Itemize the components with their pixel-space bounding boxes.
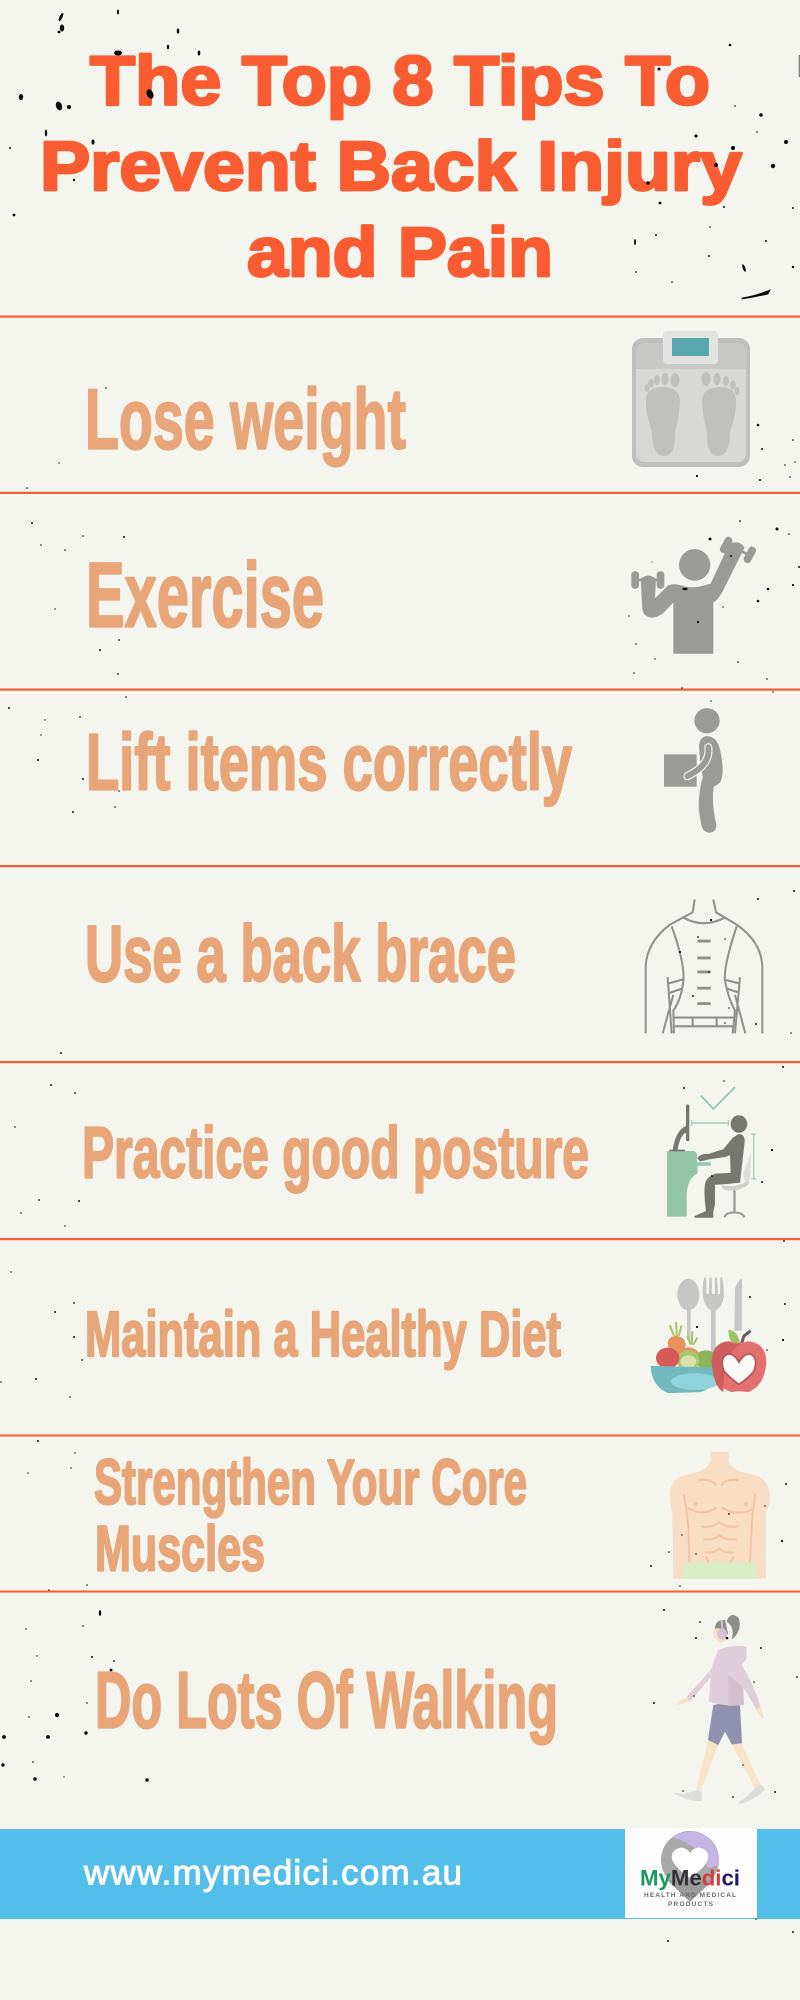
tip: Lift items correctly: Lift items correctly (86, 718, 572, 806)
logo: MyMedici: HEALTH AND MEDICAL (644, 1892, 736, 1899)
website URL: www.mymedici.com.au (83, 1854, 462, 1892)
icon: weighing scale (632, 331, 750, 467)
tip: Strengthen Your Core Muscles (94, 1446, 527, 1584)
icon: good desk posture (667, 1087, 756, 1218)
tip: Strengthen Your Core Muscles: Strengthen Your Core (94, 1446, 527, 1518)
logo: MyMedici (625, 1828, 757, 1918)
title: Prevent Back Injury (40, 127, 742, 205)
icon: person lifting dumbbells (631, 535, 757, 654)
tip: Lose weight: Lose weight (85, 372, 406, 468)
title: The Top 8 Tips To (90, 42, 710, 120)
icon: back brace (646, 899, 762, 1033)
tip: Use a back brace: Use a back brace (85, 909, 516, 998)
tip: Strengthen Your Core Muscles: Muscles (95, 1512, 265, 1584)
icon: woman walking (673, 1615, 766, 1804)
icon: muscular torso (670, 1452, 770, 1579)
tip: Exercise: Exercise (86, 544, 324, 646)
logo: MyMedici: PRODUCTS (668, 1901, 714, 1908)
tip: Maintain a Healthy Diet: Maintain a Healthy Diet (85, 1298, 561, 1370)
logo: MyMedici: MyMedici (640, 1866, 740, 1890)
icon: healthy food (651, 1277, 766, 1393)
footer band (0, 1829, 800, 1919)
icon: person lifting a box (664, 708, 723, 833)
title: and Pain (247, 213, 553, 291)
title (40, 42, 742, 291)
